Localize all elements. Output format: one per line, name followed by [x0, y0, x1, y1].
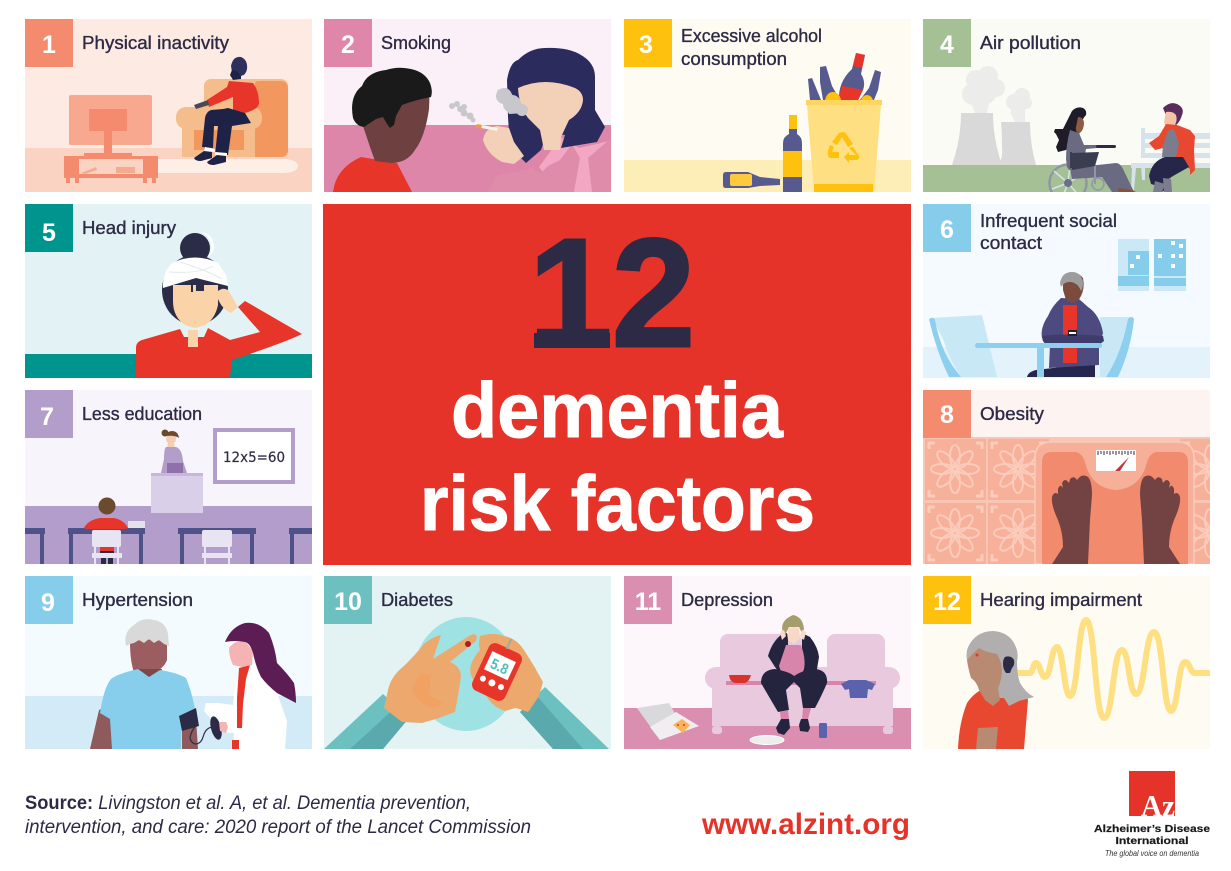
panel 8: obesity [923, 390, 1231, 564]
right foot [1140, 476, 1180, 564]
label: Physical inactivity: Physical inactivity [82, 33, 229, 53]
badge 8 [923, 390, 971, 438]
cigarette and smoke [449, 101, 498, 131]
panel 9: hypertension [25, 576, 312, 749]
windows [1118, 239, 1186, 291]
label: Hypertension: Hypertension [82, 590, 193, 610]
doctor [204, 623, 296, 749]
label: Infrequent social contact: contact [980, 233, 1042, 253]
badge 6 [923, 204, 971, 252]
teacher behind podium [161, 430, 187, 473]
armchair [176, 79, 288, 157]
blood pressure cuff and gauge [179, 708, 221, 744]
label: Smoking: Smoking [381, 33, 451, 53]
empty chair [202, 530, 232, 564]
woman with bandaged head [136, 232, 302, 377]
left foot [1052, 476, 1092, 564]
big number 12: 12 [529, 207, 695, 379]
man with head in hands [761, 615, 827, 735]
smoke clouds [962, 66, 1032, 122]
badge 4: 4 [940, 31, 954, 59]
bathroom scale [1035, 442, 1194, 564]
badge 12 [923, 576, 971, 624]
title line: dementia: dementia [451, 366, 784, 454]
badge 8: 8 [940, 401, 954, 429]
source citation: Source: Livingston et al. A, et al. Dementia prevention, [25, 793, 471, 814]
panel 7: less education [25, 390, 312, 564]
label: Excessive alcohol consumption: consumption [681, 49, 787, 69]
badge 5: 5 [42, 219, 56, 247]
cooling towers [952, 113, 1036, 165]
left sleeve [324, 694, 409, 749]
right sleeve [520, 687, 609, 749]
park bench [1131, 128, 1210, 190]
right hand holding glucose meter: 5.8 [488, 656, 511, 679]
label: Infrequent social contact: Infrequent social [980, 211, 1117, 231]
label: Air pollution: Air pollution [980, 33, 1081, 53]
rug [150, 159, 298, 173]
badge 6: 6 [940, 216, 954, 244]
badge 2 [324, 19, 372, 67]
panel 10: diabetes [324, 576, 611, 749]
chalkboard: 12x5=60 [223, 450, 285, 466]
desks [25, 528, 312, 564]
badge 2: 2 [341, 31, 355, 59]
patient man [90, 619, 198, 749]
label: Excessive alcohol consumption [681, 26, 822, 69]
title line: risk factors: risk factors [420, 459, 815, 547]
woman in wheelchair [1050, 107, 1136, 202]
label: Diabetes: Diabetes [381, 590, 453, 610]
badge 5 [25, 204, 73, 252]
fallen bottle [723, 172, 780, 188]
right hand holding glucose meter [470, 632, 543, 712]
panel 11: depression [624, 576, 911, 749]
badge 3 [624, 19, 672, 67]
panel 5: head injury [25, 204, 312, 378]
Alzheimer's Disease International logo: International [1116, 835, 1189, 847]
badge 9: 9 [41, 589, 55, 617]
woman smoking [483, 48, 611, 192]
television on cabinet [64, 95, 158, 183]
sound wave [1014, 620, 1210, 718]
label: Hearing impairment: Hearing impairment [980, 590, 1142, 610]
central title panel [323, 204, 911, 565]
panel 12: hearing impairment [923, 576, 1210, 749]
pizza box [637, 703, 699, 740]
badge 7 [25, 390, 73, 438]
badge 3: 3 [639, 31, 653, 59]
panel 1: physical inactivity [25, 19, 312, 192]
left hand pointing [384, 634, 477, 723]
Alzheimer's Disease International logo: Az [1141, 788, 1175, 823]
badge 4 [923, 19, 971, 67]
Alzheimer's Disease International logo: Alzheimer’s Disease [1094, 823, 1210, 835]
drink can [819, 723, 827, 738]
label: Head injury: Head injury [82, 218, 176, 238]
badge 10 [324, 576, 372, 624]
panel 3: excessive alcohol consumption [624, 19, 911, 192]
podium [151, 473, 203, 513]
empty left chair [929, 315, 997, 377]
label: Depression: Depression [681, 590, 773, 610]
table [975, 343, 1102, 377]
Alzheimer's Disease International logo [1094, 771, 1210, 858]
scale dial [1096, 450, 1136, 471]
source citation: intervention, and care: 2020 report of the Lancet Commission [25, 817, 531, 838]
badge 11 [624, 576, 672, 624]
seated man in turban [194, 57, 259, 165]
Alzheimer's Disease International logo: The global voice on dementia [1105, 849, 1199, 858]
panel 6: infrequent social contact [923, 204, 1210, 378]
upright bottle [783, 115, 802, 192]
badge 7: 7 [40, 403, 54, 431]
label: Infrequent social contact [980, 211, 1117, 253]
sofa [705, 634, 900, 734]
badge 1 [25, 19, 73, 67]
icon: hearing aid [1003, 656, 1014, 673]
badge 9 [25, 576, 73, 624]
badge 1: 1 [42, 31, 56, 59]
floor tiles [925, 439, 1231, 564]
bottles in bin [808, 53, 881, 100]
label: Obesity: Obesity [980, 404, 1044, 424]
recycling bin [806, 100, 882, 192]
woman with hearing aid [958, 631, 1034, 749]
chalkboard [215, 430, 293, 482]
plate [750, 736, 784, 744]
badge 10: 10 [334, 588, 362, 616]
bowl [729, 675, 751, 683]
seated older man [1027, 272, 1104, 377]
right chair [1100, 317, 1134, 377]
boy seen from behind [333, 68, 432, 192]
website url: www.alzint.org [701, 808, 910, 841]
label: Excessive alcohol consumption: Excessive alcohol [681, 26, 822, 46]
badge 12: 12 [933, 588, 961, 616]
t-shirt [841, 680, 875, 698]
panel 2: smoking [324, 19, 611, 192]
student seen from behind [84, 498, 145, 564]
badge 11: 11 [635, 588, 661, 616]
man on bench covering mouth [1149, 103, 1195, 192]
icon: recycle symbol [828, 132, 859, 163]
label: Less education: Less education [82, 404, 202, 424]
source citation [25, 793, 531, 838]
panel 4: air pollution [923, 19, 1210, 202]
